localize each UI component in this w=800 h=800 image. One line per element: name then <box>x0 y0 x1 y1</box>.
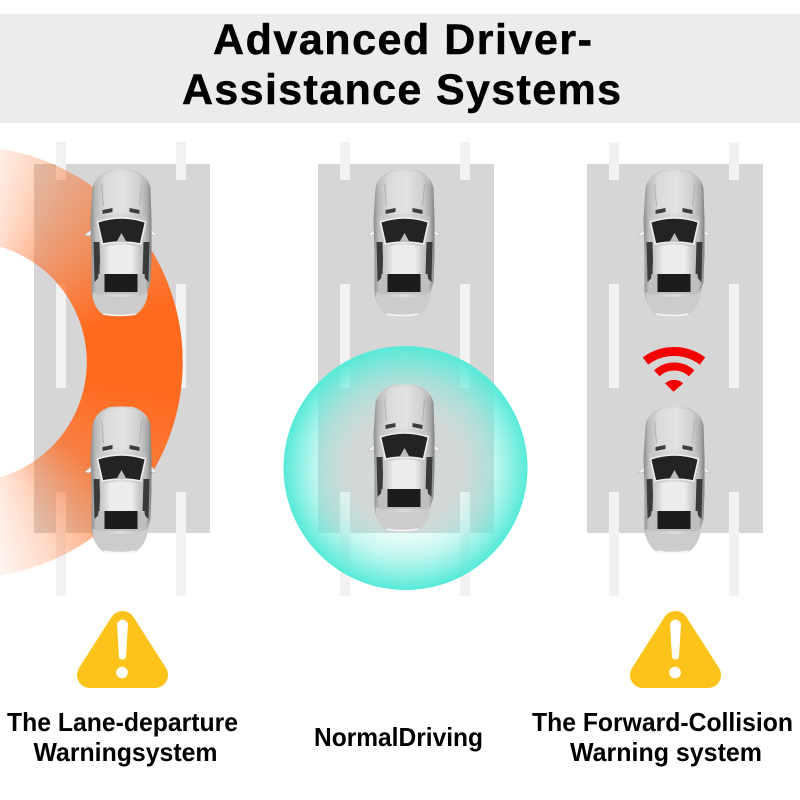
label: forward-collision warning <box>532 707 793 767</box>
car: upper <box>368 170 440 316</box>
panel: forward collision warning <box>532 142 793 767</box>
label: forward-collision warning: Warning system <box>570 737 762 767</box>
car: upper <box>84 170 158 316</box>
car: lower <box>84 406 158 553</box>
label: normal driving: NormalDriving <box>314 722 483 752</box>
icon: red signal waves <box>646 352 702 392</box>
icon: warning triangle <box>643 620 708 678</box>
orange warning arc <box>0 146 183 578</box>
label: forward-collision warning: The Forward-Collision <box>532 707 793 737</box>
lane markings <box>609 142 739 596</box>
title: Advanced Driver- <box>213 16 592 64</box>
panel: lane departure warning <box>0 142 238 767</box>
label: lane-departure warning: The Lane-departure <box>7 707 238 737</box>
road <box>34 164 210 533</box>
title: Assistance Systems <box>182 66 621 114</box>
car: upper <box>638 170 710 316</box>
label: lane-departure warning <box>7 707 238 767</box>
title <box>0 14 800 123</box>
road <box>587 164 763 533</box>
teal safety circle <box>284 346 528 590</box>
lane markings <box>56 142 186 596</box>
road <box>318 164 494 533</box>
lane markings <box>340 142 470 596</box>
icon: warning triangle <box>90 620 155 678</box>
panel: normal driving <box>284 142 528 752</box>
car: lower <box>368 384 440 531</box>
label: lane-departure warning: Warningsystem <box>34 737 218 767</box>
car: lower <box>638 406 710 553</box>
